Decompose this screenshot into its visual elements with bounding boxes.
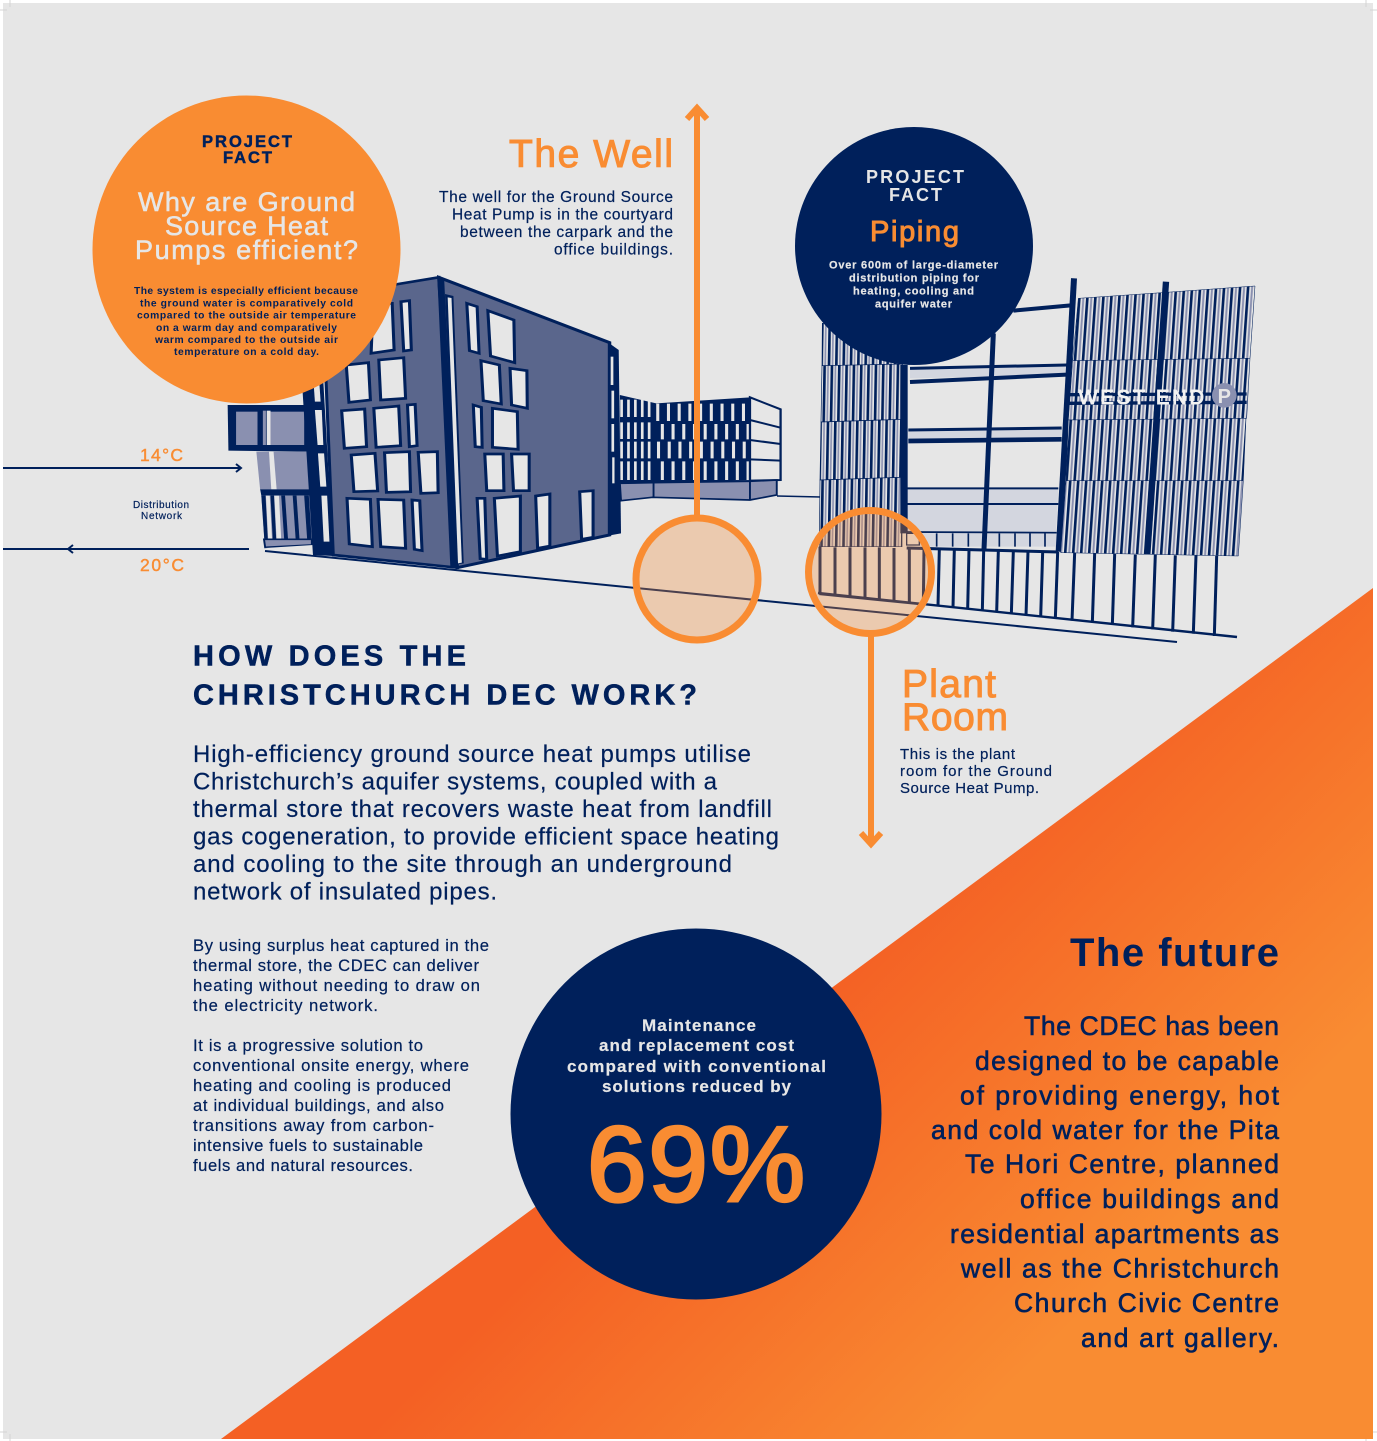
body text: thermal store, the CDEC can deliver: [193, 956, 479, 975]
main heading: [193, 640, 697, 712]
statistic caption: solutions reduced by: [602, 1077, 792, 1096]
the well description: between the carpark and the: [460, 224, 673, 241]
body text: [193, 936, 489, 1175]
illustration: left office building: [228, 277, 621, 568]
question heading: Source Heat: [165, 211, 328, 241]
West End sign: P: [1218, 386, 1231, 408]
building windows: [342, 301, 593, 559]
explanation text: temperature on a cold day.: [174, 347, 319, 358]
carpark right facade: [1061, 282, 1255, 556]
return temperature: 20°C: [140, 555, 184, 575]
statistic caption: and replacement cost: [599, 1036, 794, 1055]
plant room description: Source Heat Pump.: [900, 780, 1039, 797]
the well description: The well for the Ground Source: [439, 189, 673, 206]
plant room description: room for the Ground: [900, 763, 1052, 780]
well location ring: [636, 518, 758, 640]
question heading: Pumps efficient?: [135, 235, 358, 265]
project fact circle: why efficient: [92, 96, 400, 404]
piping text: Over 600m of large-diameter: [829, 260, 999, 272]
piping text: distribution piping for: [849, 272, 980, 284]
supply temperature: 14°C: [140, 445, 183, 465]
project fact circle: piping: [795, 127, 1033, 365]
piping text: [829, 260, 999, 310]
the well description: Heat Pump is in the courtyard: [452, 206, 673, 224]
plant room description: [900, 746, 1052, 797]
explanation text: warm compared to the outside air: [154, 335, 338, 346]
the well description: [439, 189, 673, 258]
network label: [133, 500, 189, 522]
West End sign: WEST END: [1079, 387, 1204, 409]
body text: heating and cooling is produced: [193, 1076, 451, 1095]
body text: intensive fuels to sustainable: [193, 1136, 423, 1155]
network label: Distribution: [133, 500, 189, 511]
the future text: well as the Christchurch: [960, 1254, 1279, 1284]
intro paragraph: [193, 741, 779, 906]
statistic caption: [567, 1016, 826, 1096]
question heading: [135, 187, 358, 265]
carpark central frame: [904, 278, 1074, 552]
main heading: HOW DOES THE: [193, 640, 466, 672]
statistic caption: compared with conventional: [567, 1057, 826, 1076]
project fact label: PROJECT: [202, 133, 292, 151]
orange gradient triangle: [221, 588, 1373, 1439]
body text: the electricity network.: [193, 996, 378, 1015]
the future text: of providing energy, hot: [960, 1080, 1280, 1110]
building right face: [439, 277, 610, 568]
explanation text: the ground water is comparatively cold: [140, 298, 353, 310]
question heading: Why are Ground: [138, 187, 355, 217]
piping text: heating, cooling and: [853, 286, 974, 298]
illustration: middle distance building: [620, 395, 781, 501]
the future text: and cold water for the Pita: [931, 1115, 1279, 1145]
distribution network diagram: [3, 445, 249, 575]
intro paragraph: Christchurch’s aquifer systems, coupled with a: [193, 768, 718, 796]
intro paragraph: High-efficiency ground source heat pumps utilise: [193, 741, 751, 768]
plant room heading: [902, 663, 1008, 739]
the well description: office buildings.: [554, 242, 673, 258]
illustration: West End carpark building: [819, 278, 1255, 636]
building corner strip: [437, 277, 464, 568]
the future text: residential apartments as: [950, 1219, 1279, 1249]
body text: It is a progressive solution to: [193, 1036, 423, 1055]
body text: at individual buildings, and also: [193, 1096, 444, 1115]
plant room location ring: [808, 510, 932, 634]
intro paragraph: thermal store that recovers waste heat from landfill: [193, 796, 772, 823]
building end band: [608, 343, 621, 536]
explanation text: compared to the outside air temperature: [137, 310, 356, 322]
body text: fuels and natural resources.: [193, 1156, 413, 1175]
piping text: aquifer water: [875, 298, 953, 310]
project fact label: PROJECT: [866, 167, 964, 187]
the future text: Church Civic Centre: [1014, 1288, 1279, 1318]
the future text: office buildings and: [1020, 1184, 1279, 1214]
main heading: CHRISTCHURCH DEC WORK?: [193, 680, 697, 712]
perimeter fence: [819, 547, 1217, 636]
the future text: [931, 1011, 1280, 1353]
arrow: down from plant room: [861, 634, 881, 844]
piping heading: Piping: [870, 216, 959, 248]
the future text: Te Hori Centre, planned: [965, 1149, 1279, 1179]
body text: transitions away from carbon-: [193, 1116, 434, 1135]
plant room heading: Plant: [902, 663, 996, 706]
explanation text: The system is especially efficient because: [134, 286, 358, 297]
arrow: supply: [3, 464, 241, 472]
statistic circle: [510, 928, 882, 1300]
plant room description: This is the plant: [900, 746, 1016, 763]
plant room heading: Room: [902, 696, 1008, 739]
intro paragraph: and cooling to the site through an underground: [193, 851, 732, 878]
explanation text: on a warm day and comparatively: [156, 323, 337, 334]
left wing of building: [228, 382, 333, 556]
project fact label: FACT: [223, 149, 272, 167]
carpark left tower facade: [819, 323, 903, 547]
project fact label: [202, 133, 292, 167]
body text: heating without needing to draw on: [193, 976, 480, 995]
building left face: [323, 277, 457, 568]
explanation text: [134, 286, 358, 358]
the well heading: The Well: [509, 133, 673, 176]
illustration: ground lines: [265, 496, 1237, 642]
project fact label: [866, 167, 964, 205]
arrow: return: [3, 545, 249, 553]
statistic value: 69%: [587, 1104, 805, 1224]
arrow: up from well: [687, 108, 707, 516]
intro paragraph: network of insulated pipes.: [193, 878, 497, 906]
project fact label: FACT: [889, 185, 942, 205]
intro paragraph: gas cogeneration, to provide efficient space heating: [193, 824, 779, 850]
network label: Network: [141, 511, 183, 522]
the future text: The CDEC has been: [1024, 1011, 1279, 1041]
the future text: designed to be capable: [975, 1046, 1279, 1076]
body text: By using surplus heat captured in the: [193, 936, 489, 955]
the future text: and art gallery.: [1081, 1323, 1279, 1353]
the future heading: The future: [1070, 931, 1279, 975]
statistic caption: Maintenance: [642, 1016, 756, 1035]
body text: conventional onsite energy, where: [193, 1056, 469, 1075]
West End sign: [1068, 383, 1247, 409]
